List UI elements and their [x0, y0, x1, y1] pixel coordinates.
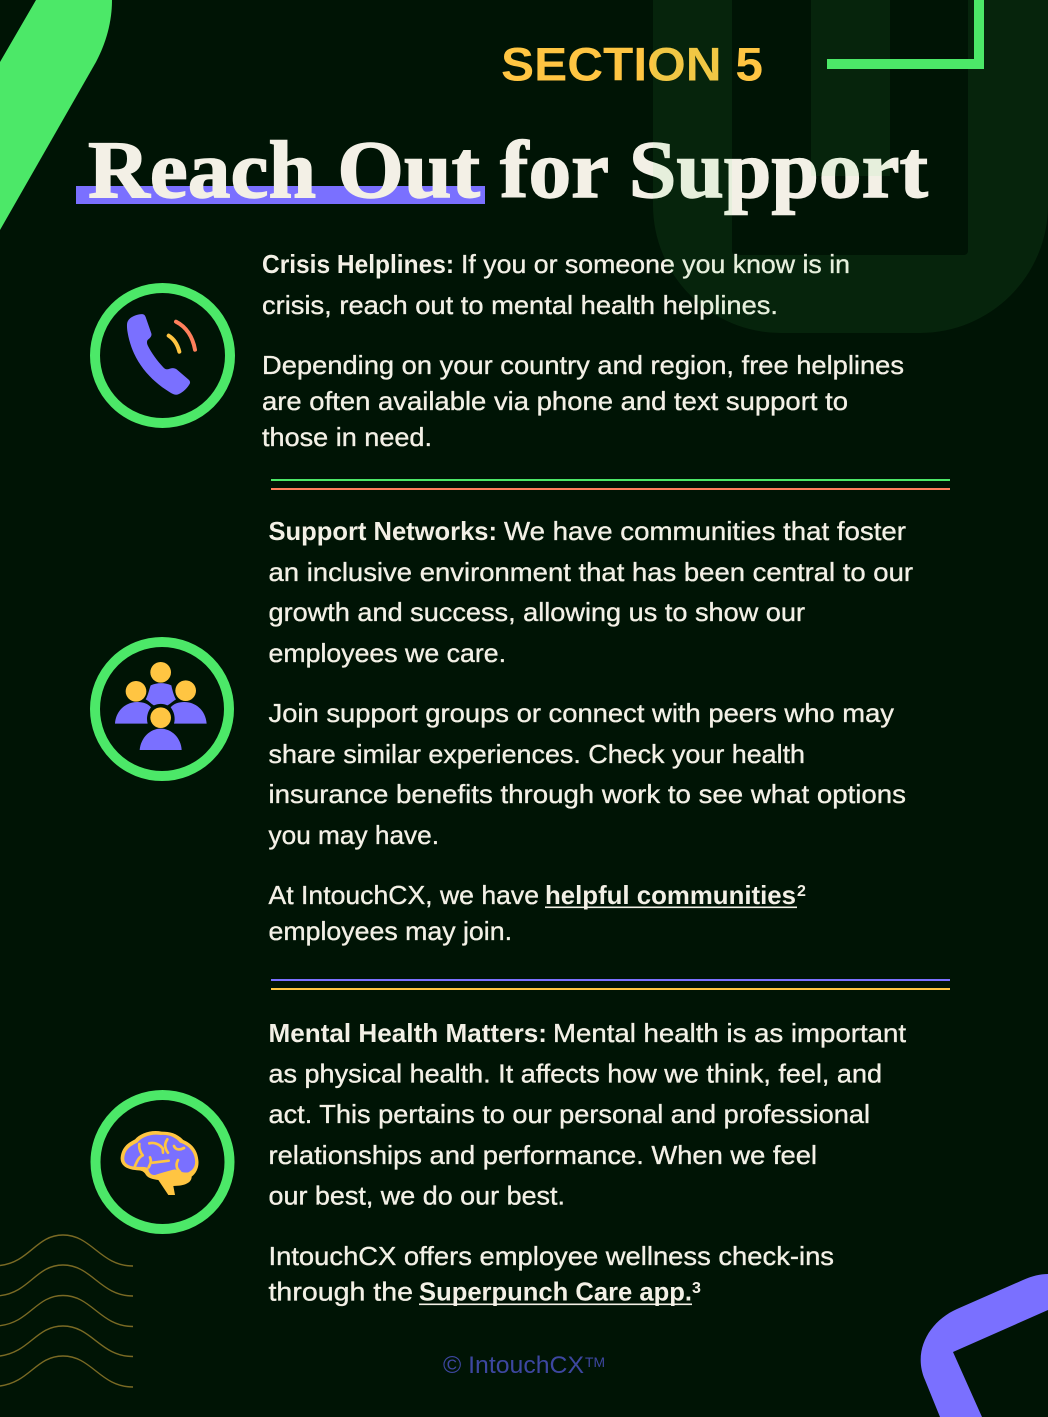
text block: crisis helplines: Depending on your country and region, free helplines [262, 350, 904, 380]
text block: support networks [268, 516, 913, 946]
icon: people in circle [95, 642, 229, 776]
text block: mental health matters: IntouchCX offers employee wellness check-ins [268, 1241, 834, 1271]
text block: support networks: Join support groups or connect with peers who may [268, 698, 894, 728]
text block: mental health matters: Mental health is as important [553, 1018, 907, 1048]
text block: support networks: share similar experiences. Check your health [268, 739, 805, 769]
decorative green slash top left [0, 0, 112, 230]
text block: support networks: growth and success, allowing us to show our [268, 597, 805, 627]
text block: crisis helplines: If you or someone you know is in [461, 249, 850, 279]
text block: support networks: At IntouchCX, we have [268, 880, 539, 910]
text block: mental health matters [268, 1018, 907, 1306]
text block: crisis helplines [262, 249, 904, 452]
text block: support networks: an inclusive environment that has been central to our [268, 557, 913, 587]
decorative wave lines [0, 1235, 133, 1387]
text block: crisis helplines: those in need. [262, 422, 432, 452]
text block: crisis helplines: crisis, reach out to mental health helplines. [262, 290, 778, 320]
footer copyright: © IntouchCX [443, 1352, 584, 1379]
section label: SECTION 5 [501, 38, 763, 90]
decorative purple corner bracket [921, 1274, 1048, 1417]
text block: support networks: 2 [797, 883, 806, 900]
text block: mental health matters: Superpunch Care app. [419, 1276, 692, 1306]
text block: support networks: employees we care. [268, 638, 506, 668]
text block: support networks: employees may join. [268, 916, 512, 946]
text block: support networks: We have communities that foster [504, 516, 906, 546]
icon: phone in circle [95, 288, 230, 423]
text block: mental health matters: act. This pertains to our personal and professional [268, 1099, 870, 1129]
text block: mental health matters: relationships and performance. When we feel [268, 1140, 817, 1170]
text block: support networks: you may have. [268, 820, 439, 850]
text block: support networks: helpful communities [545, 880, 796, 910]
text block: mental health matters: our best, we do our best. [268, 1180, 565, 1210]
text block: support networks: Support Networks: [268, 516, 497, 546]
title [76, 124, 928, 215]
decorative background U shape [653, 0, 1048, 333]
text block: crisis helplines: Crisis Helplines: [262, 249, 454, 279]
icon: brain in circle [96, 1095, 230, 1229]
text block: mental health matters: 3 [692, 1280, 701, 1297]
text block: support networks: insurance benefits through work to see what options [268, 779, 906, 809]
text block: mental health matters: Mental Health Matters: [268, 1018, 547, 1048]
footer copyright: TM [585, 1354, 605, 1370]
title: for Support [500, 124, 928, 215]
decorative green corner bracket [827, 0, 984, 69]
text block: mental health matters: as physical health. It affects how we think, feel, and [268, 1058, 882, 1088]
title: Reach Out [88, 124, 480, 215]
text block: mental health matters: through the [268, 1276, 413, 1306]
text block: crisis helplines: are often available via phone and text support to [262, 386, 848, 416]
